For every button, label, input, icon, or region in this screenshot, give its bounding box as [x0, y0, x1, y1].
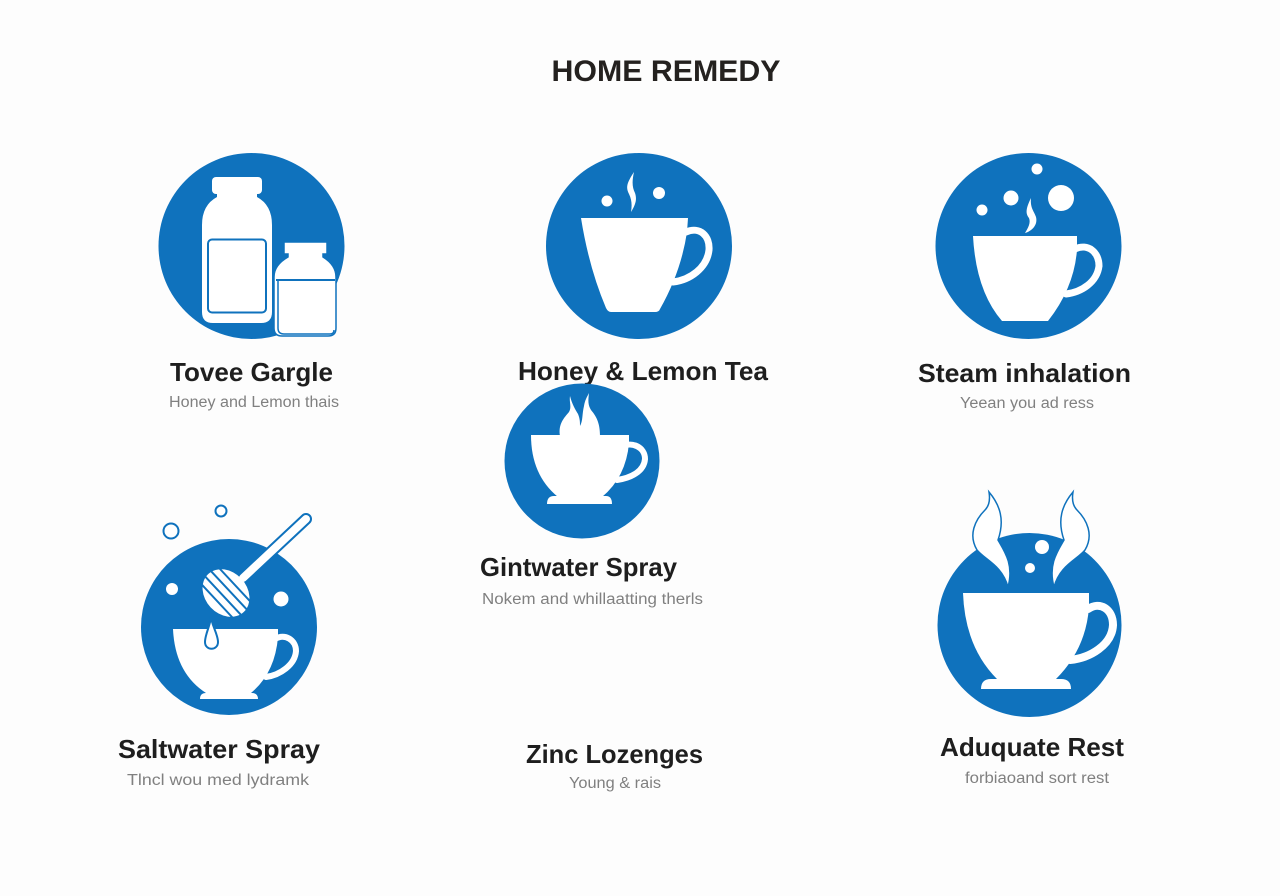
panel: Gintwater Spray — [480, 384, 703, 608]
heading: Honey & Lemon Tea — [518, 356, 769, 386]
heading: Steam inhalation — [918, 358, 1131, 388]
description: Young & rais — [569, 775, 661, 792]
title: HOME REMEDY — [552, 55, 780, 88]
panel: Saltwater Spray — [118, 506, 321, 789]
panel: Honey & Lemon Tea — [518, 153, 769, 386]
heading: Aduquate Rest — [940, 732, 1124, 762]
icon: honey dipper and cup — [141, 506, 317, 715]
panel: Adequate Rest — [938, 492, 1124, 787]
description: Nokem and whillaatting therls — [482, 591, 703, 608]
description: Tlncl wou med lydramk — [127, 772, 309, 789]
heading: Zinc Lozenges — [526, 739, 703, 769]
icon: cup with steam — [546, 153, 732, 339]
icon: bottles — [158, 153, 344, 339]
heading: Gintwater Spray — [480, 552, 678, 582]
icon: cup with bubbles — [936, 153, 1122, 339]
heading: Saltwater Spray — [118, 734, 321, 764]
heading: Tovee Gargle — [170, 357, 333, 387]
icon: cup with flame steam — [504, 384, 660, 538]
description: forbiaoand sort rest — [965, 770, 1110, 787]
panel: Steam inhalation — [918, 153, 1131, 412]
panel: Tovee Gargle — [158, 153, 344, 411]
description: Honey and Lemon thais — [169, 394, 339, 411]
panel: Zinc Lozenges — [526, 739, 703, 792]
description: Yeean you ad ress — [960, 395, 1094, 412]
icon: large cup with steam — [938, 492, 1122, 717]
